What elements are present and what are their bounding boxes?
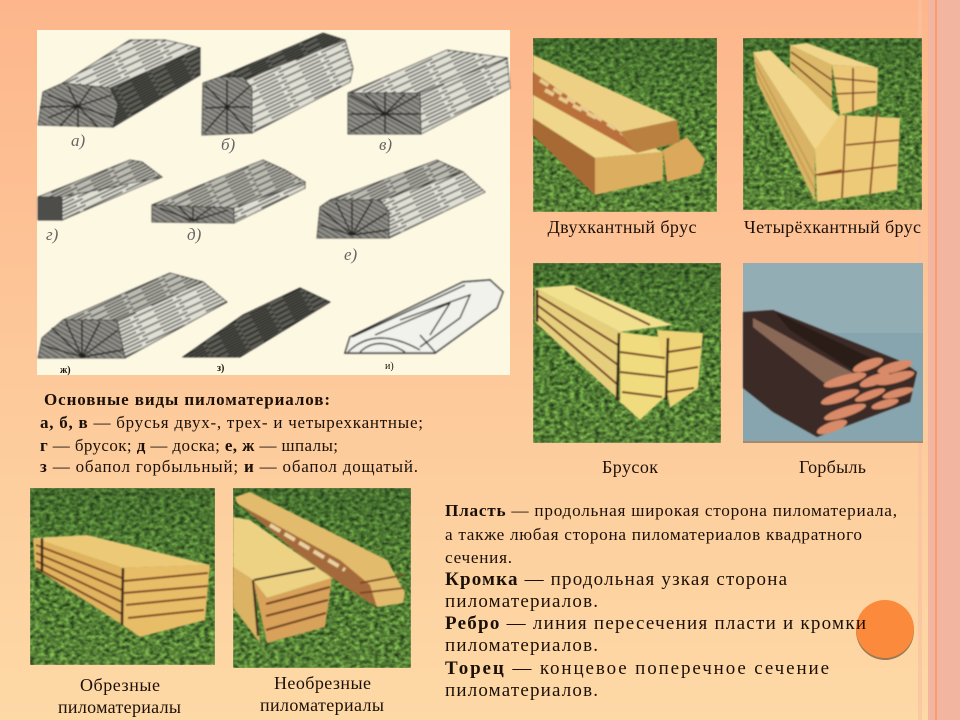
illustration caption — [40, 390, 423, 476]
caption: four-edged beam: Четырёхкантный брус — [744, 217, 921, 237]
timber ж — [38, 273, 227, 358]
definitions text block — [445, 501, 897, 701]
label е: е) — [344, 245, 358, 264]
definitions text block: а также любая сторона пиломатериалов квадратного — [445, 525, 862, 544]
illustration caption: а, б, в — брусья двух-, трех- и четырехкантные; — [40, 413, 423, 432]
photo: small bar — [533, 263, 721, 443]
timber з — [183, 288, 330, 357]
definitions text block: пиломатериалов. — [445, 591, 598, 612]
illustration caption: Основные виды пиломатериалов: — [44, 390, 330, 409]
caption: small bar: Брусок — [602, 457, 658, 477]
illustration panel: types of lumber — [37, 30, 510, 376]
decorative orange circle — [856, 600, 914, 660]
caption: unedged lumber — [260, 673, 384, 715]
label и: и) — [385, 361, 394, 372]
photo: two-edged beam — [533, 38, 717, 212]
timber б — [202, 33, 353, 135]
definitions text block: сечения. — [445, 548, 512, 567]
caption: two-edged beam: Двухкантный брус — [548, 217, 696, 237]
label а: а) — [71, 131, 86, 150]
photo: unedged lumber — [233, 488, 411, 668]
caption: unedged lumber: Необрезные — [274, 673, 371, 693]
definitions text block: Пласть — продольная широкая сторона пиломатериала, — [445, 501, 897, 520]
label з: з) — [217, 363, 224, 374]
definitions text block: Ребро — линия пересечения пласти и кромки — [445, 613, 866, 634]
definitions text block: Торец — концевое поперечное сечение — [445, 658, 829, 679]
illustration caption: г — брусок; д — доска; е, ж — шпалы; — [40, 436, 338, 455]
caption: edged lumber: Обрезные — [80, 675, 160, 695]
label г: г) — [46, 225, 59, 244]
illustration caption: з — обапол горбыльный; и — обапол дощатый. — [40, 457, 418, 476]
timber д — [152, 160, 305, 223]
caption: edged lumber: пиломатериалы — [58, 697, 181, 717]
label б: б) — [221, 135, 236, 154]
definitions text block: пиломатериалов. — [445, 635, 598, 656]
right edge decorative stripes — [918, 0, 960, 720]
caption: slab: Горбыль — [799, 457, 866, 477]
timber е — [317, 160, 485, 238]
definitions text block: пиломатериалов. — [445, 680, 598, 701]
timber а — [38, 40, 200, 127]
timber в — [348, 50, 510, 134]
label д: д) — [187, 225, 202, 244]
timber г — [38, 160, 162, 220]
timber и — [345, 280, 503, 353]
photo: edged lumber — [30, 488, 215, 665]
definitions text block: Кромка — продольная узкая сторона — [445, 569, 788, 590]
photo: slab — [743, 263, 923, 443]
label ж: ж) — [60, 365, 71, 376]
caption: edged lumber — [58, 675, 181, 717]
photo: four-edged beam — [743, 38, 922, 210]
caption: unedged lumber: пиломатериалы — [260, 695, 384, 715]
label в: в) — [379, 135, 392, 154]
